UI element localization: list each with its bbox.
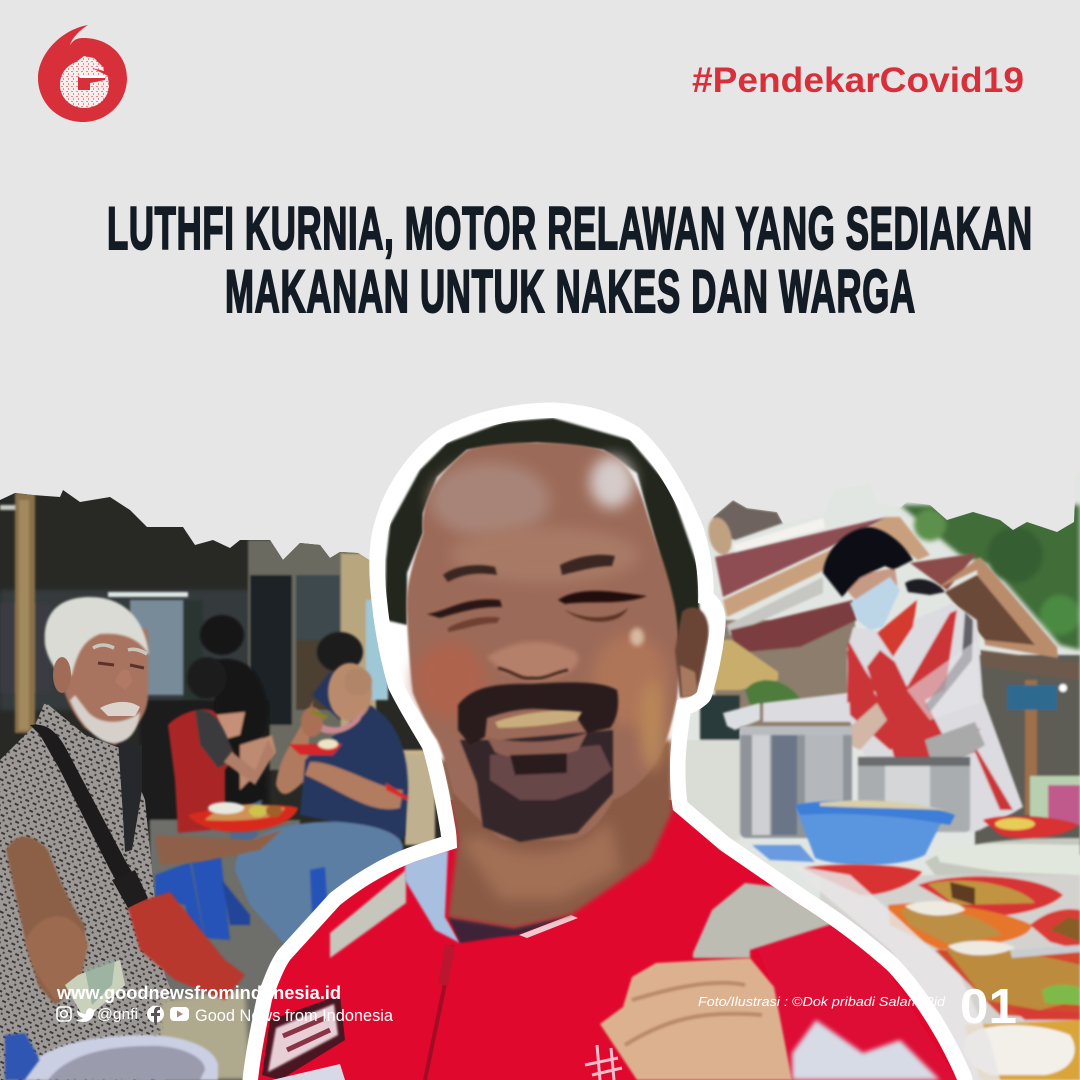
person in black shirt: [200, 615, 363, 850]
corridor wall and doors: [0, 493, 435, 1070]
title: LUTHFI KURNIA, MOTOR RELAWAN YANG SEDIAKAN: [107, 196, 1032, 262]
hashtag: #PendekarCovid19: [692, 61, 1024, 100]
website and social links: Good News from Indonesia: [195, 1007, 394, 1025]
blue plastic stools: [155, 848, 328, 942]
forehead tones: [430, 462, 550, 538]
cheeks: [414, 642, 486, 718]
face: [407, 442, 679, 840]
nose: [487, 642, 579, 680]
person in red shirt: [168, 657, 275, 833]
neck: [440, 740, 672, 928]
website and social links: [56, 983, 394, 1025]
icon: twitter: [76, 1008, 96, 1022]
trees: [900, 505, 1080, 650]
teeth: [495, 711, 582, 728]
volunteer: [723, 527, 1023, 833]
icon: facebook: [147, 1006, 164, 1022]
website and social links: @gnfi: [97, 1007, 138, 1023]
page number: 01: [960, 980, 1017, 1034]
title: [107, 196, 1032, 325]
house and roof: [680, 500, 1080, 855]
moustache and beard: [458, 682, 618, 842]
eyebrows and eyes: [427, 555, 647, 632]
website and social links: www.goodnewsfromindonesia.id: [56, 983, 341, 1003]
steel pots: [740, 726, 970, 838]
red jersey: [240, 800, 980, 1080]
photo: left, food recipient and diners: [0, 480, 480, 1080]
photo credit: Foto/Ilustrasi : ©Dok pribadi Salam Rid: [698, 994, 946, 1009]
hair: [385, 418, 700, 660]
logo: GNFI red swirl with garuda G: [38, 25, 127, 122]
portrait: smiling man in red jersey: [240, 418, 980, 1080]
seated man eating: [235, 663, 409, 945]
ear: [675, 607, 709, 698]
icon: youtube: [170, 1007, 189, 1021]
icon: instagram: [57, 1007, 71, 1021]
elderly man with gray hair: [0, 597, 282, 1080]
title: MAKANAN UNTUK NAKES DAN WARGA: [225, 259, 915, 325]
portrait: white sticker outline: [258, 418, 957, 1080]
man's food plate: [188, 802, 298, 832]
photo: right, volunteer preparing food: [686, 500, 1080, 1080]
clear plastic container: [5, 1033, 218, 1080]
blue basin: [752, 800, 955, 865]
plates and food: [790, 816, 1080, 1080]
